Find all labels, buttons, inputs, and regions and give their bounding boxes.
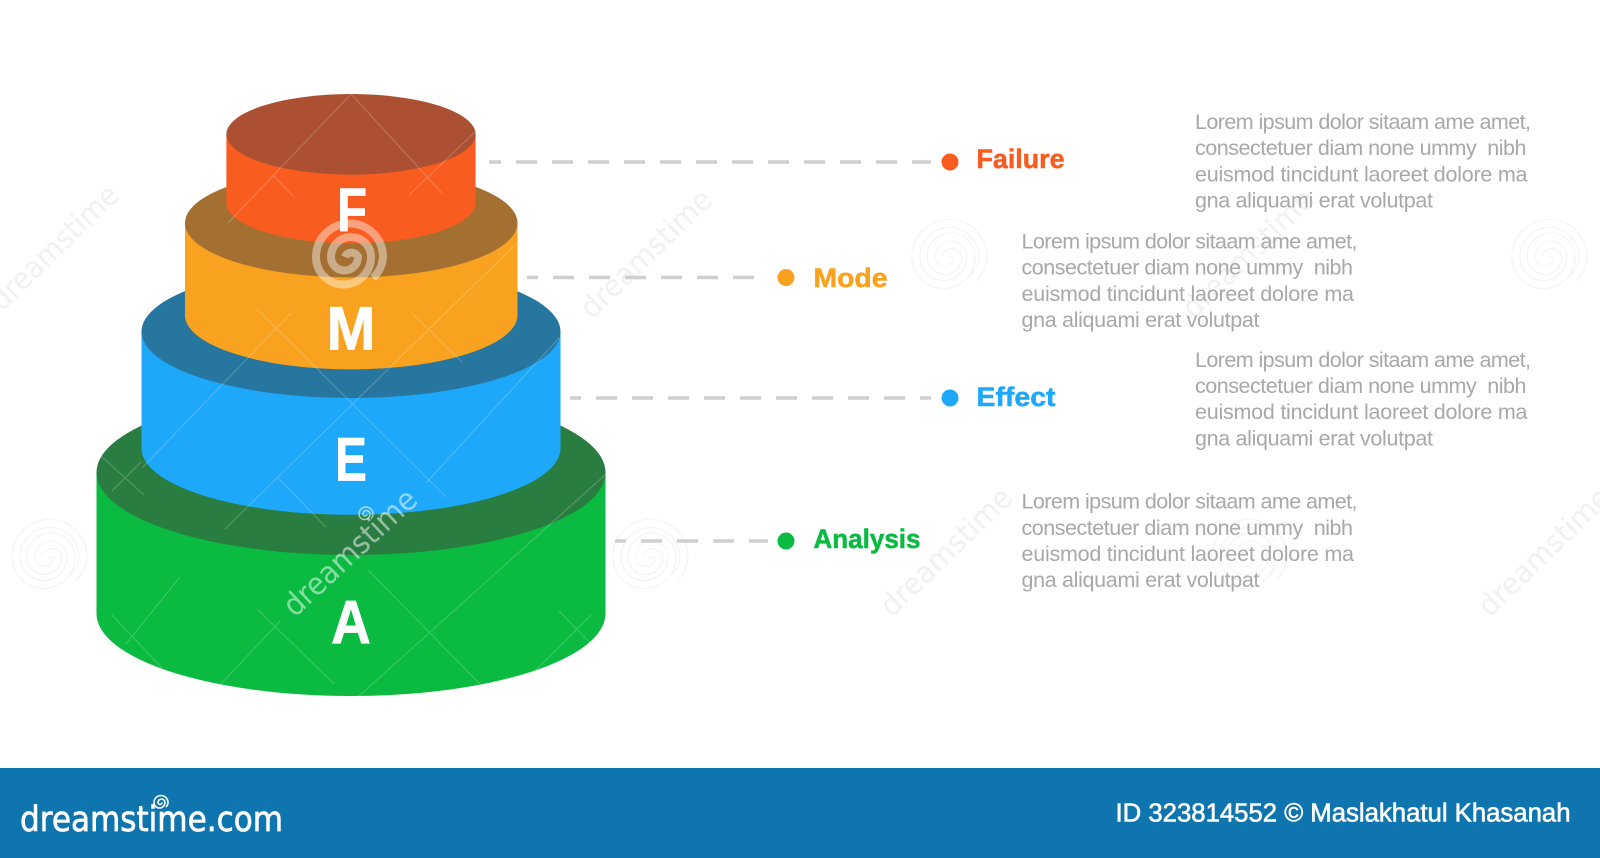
text block: Effect: euismod tincidunt laoreet dolore ma	[1195, 400, 1528, 424]
faint background watermarks	[0, 178, 1600, 624]
text block: Analysis: Lorem ipsum dolor sitaam ame amet,	[1022, 490, 1358, 514]
item: Analysis: Analysis	[814, 524, 920, 554]
credit: ID 323814552 © Maslakhatul Khasanah	[1116, 800, 1570, 828]
text block: Mode: gna aliquami erat volutpat	[1022, 308, 1260, 332]
text block: Failure: Lorem ipsum dolor sitaam ame amet,	[1195, 110, 1531, 134]
text block: Mode: euismod tincidunt laoreet dolore ma	[1022, 282, 1354, 306]
faint background watermarks: dreamstime	[873, 480, 1020, 624]
text block: Effect	[1195, 348, 1531, 450]
cylinder F: failure	[226, 94, 476, 244]
item: Effect: Effect	[976, 382, 1056, 412]
text block: Mode: Lorem ipsum dolor sitaam ame amet,	[1022, 229, 1358, 253]
cylinder A: analysis: A	[331, 589, 371, 657]
connector lines	[489, 162, 931, 541]
item: Mode: Mode	[814, 263, 888, 293]
text block: Analysis: consectetuer diam none ummy nibh	[1022, 516, 1353, 540]
text block: Failure: gna aliquami erat volutpat	[1195, 189, 1433, 213]
faint background watermarks: dreamstime	[573, 182, 720, 326]
faint background watermarks: dreamstime	[1175, 182, 1322, 326]
text block: Effect: Lorem ipsum dolor sitaam ame amet,	[1195, 348, 1531, 372]
cylinder F: failure: F	[337, 176, 367, 244]
cylinder M: mode	[185, 169, 518, 369]
item: Mode	[778, 263, 888, 293]
text block: Effect: consectetuer diam none ummy nibh	[1195, 374, 1526, 398]
cylinder E: effect	[142, 265, 560, 515]
text block: Analysis: gna aliquami erat volutpat	[1022, 568, 1260, 592]
item: Effect	[942, 382, 1056, 412]
text block: Failure: euismod tincidunt laoreet dolore ma	[1195, 162, 1528, 186]
watermark text: dreamstime	[276, 482, 425, 624]
cylinder A: analysis	[96, 390, 606, 696]
item: Failure: Failure	[976, 144, 1064, 174]
footer banner	[0, 768, 1600, 858]
text block: Analysis: euismod tincidunt laoreet dolore ma	[1022, 542, 1354, 566]
text block: Failure: consectetuer diam none ummy nibh	[1195, 136, 1526, 160]
watermark crossing lines	[101, 94, 605, 696]
text block: Failure	[1195, 110, 1531, 213]
text block: Effect: gna aliquami erat volutpat	[1195, 426, 1433, 450]
text block: Analysis	[1022, 490, 1358, 592]
text block: Mode	[1022, 229, 1358, 332]
stacked cylinder chart	[96, 94, 606, 696]
cylinder E: effect: E	[335, 425, 367, 494]
cylinder M: mode: M	[327, 294, 375, 363]
text block: Mode: consectetuer diam none ummy nibh	[1022, 256, 1353, 280]
logo: dreamstime.com	[20, 800, 283, 840]
watermark spiral	[316, 224, 383, 284]
